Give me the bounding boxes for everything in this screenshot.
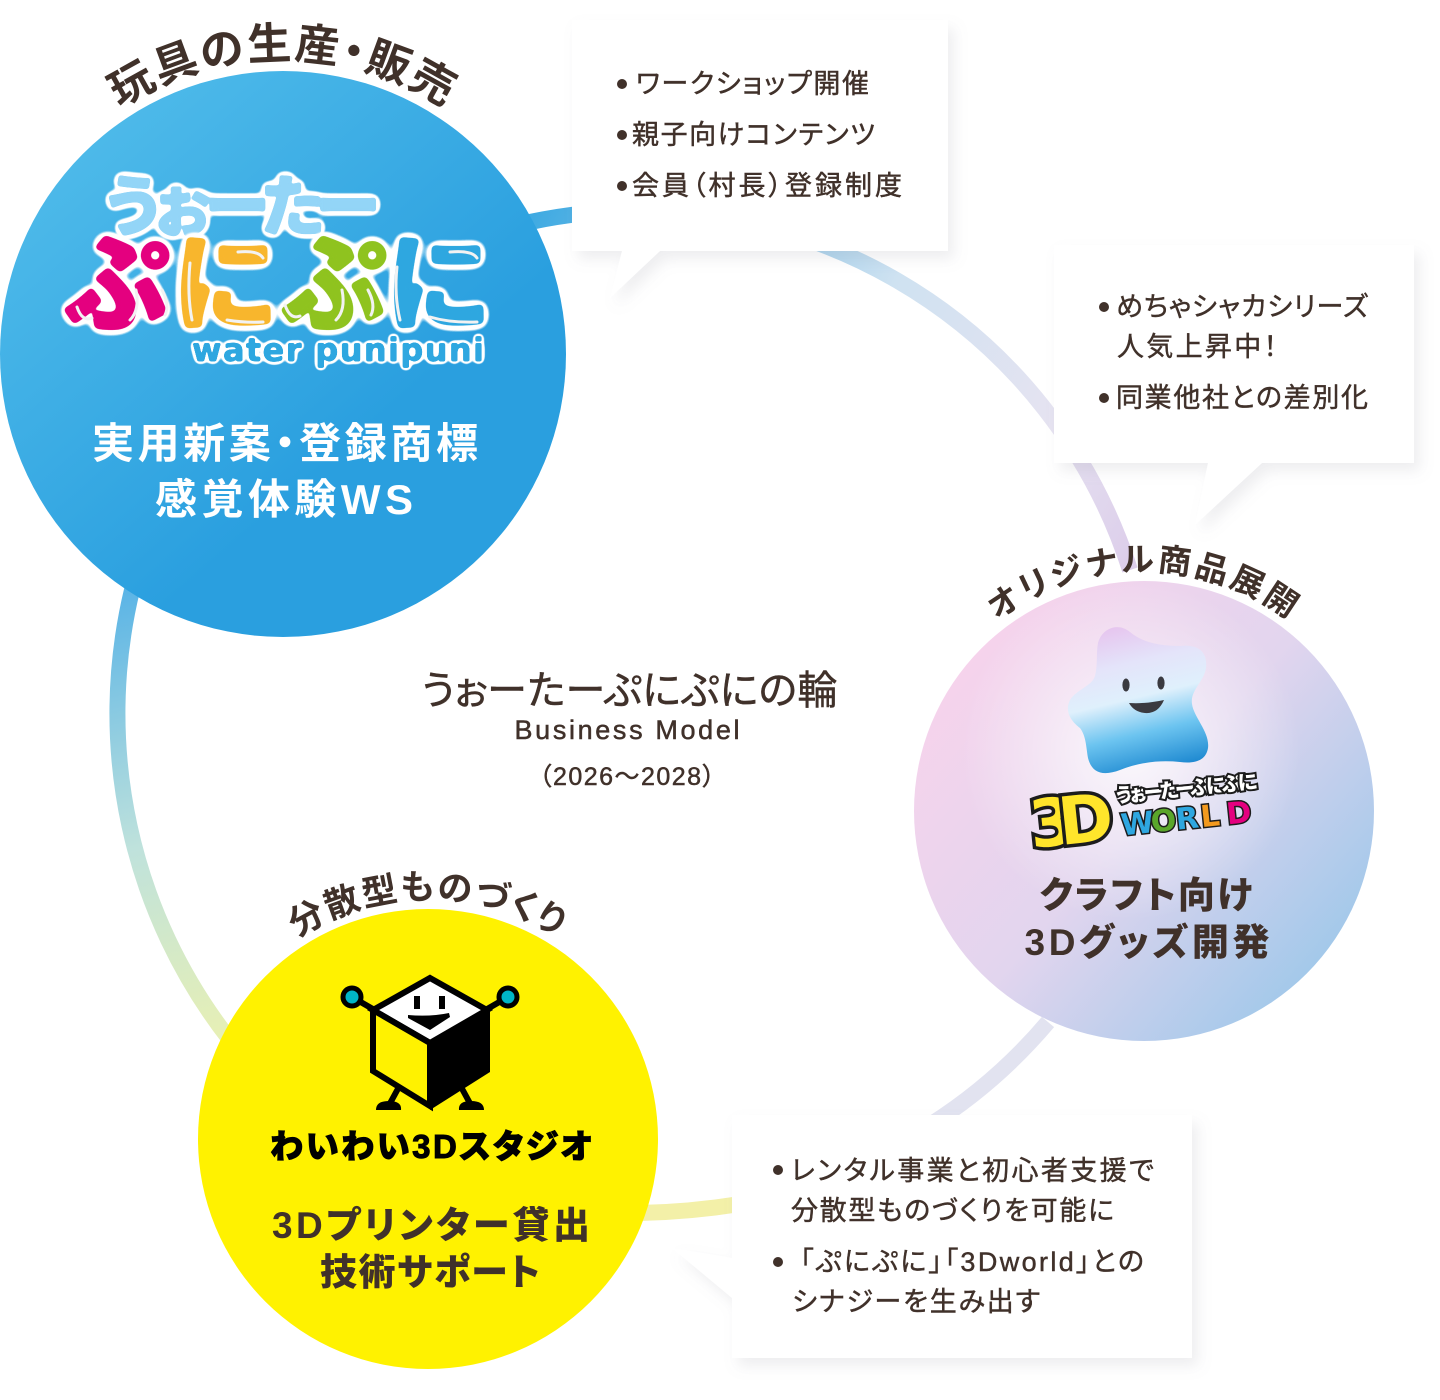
ring: business model cycle — [117, 211, 1130, 1213]
logo: 3D world: R — [1174, 800, 1201, 838]
speech bubble: workshop — [572, 20, 948, 298]
logo: 3D world: O — [1149, 803, 1178, 840]
logo: 3D world: L — [1199, 798, 1221, 835]
logo: 3D world: うぉーたーぷにぷに — [1115, 770, 1258, 808]
speech bubble: menu series: 同業他社との差別化 — [1116, 383, 1368, 413]
speech bubble: workshop: 会員（村長）登録制度 — [632, 171, 902, 201]
circle caption: 3Dプリンター貸出 — [272, 1205, 590, 1246]
circle caption: クラフト向け — [1039, 875, 1252, 916]
center heading — [422, 669, 838, 791]
logo: 3D world: W — [1119, 805, 1156, 843]
logo: water punipuni: ぷ — [281, 227, 386, 345]
center heading: うぉーたーぷにぷにの輪 — [422, 669, 838, 713]
speech bubble: menu series: めちゃシャカシリーズ — [1116, 292, 1368, 322]
speech bubble: rental: 分散型ものづくりを可能に — [791, 1196, 1114, 1226]
logo: 3D world: 3D — [1025, 779, 1117, 864]
logo: water punipuni: に — [173, 227, 276, 345]
circle caption: 感覚体験WS — [155, 476, 413, 523]
icon: star character — [1068, 627, 1208, 773]
logo: water punipuni — [64, 170, 489, 369]
logo: 3D world: D — [1225, 795, 1253, 832]
logo: water punipuni: に — [386, 227, 489, 345]
speech bubble: rental: シナジーを生み出す — [792, 1287, 1040, 1317]
speech bubble: rental — [672, 1115, 1192, 1358]
arc label: original goods: オリジナル商品展開 — [988, 544, 1301, 618]
speech bubble: workshop: ワークショップ開催 — [636, 69, 869, 99]
circle caption — [1024, 875, 1270, 963]
logo: 3D world — [1025, 763, 1263, 864]
panel: 3D printer circle — [198, 871, 658, 1369]
icon: cube character — [343, 978, 517, 1110]
arc label: toy production: 玩具の生産・販売 — [104, 22, 459, 107]
circle caption — [92, 420, 478, 523]
circle caption — [272, 1205, 590, 1293]
center heading: Business Model — [514, 715, 740, 745]
panel: 3D goods circle — [914, 544, 1374, 1041]
logo: water punipuni: water punipuni — [192, 331, 484, 369]
circle caption: 技術サポート — [320, 1252, 540, 1293]
center heading: （2026～2028） — [539, 763, 715, 791]
speech bubble: menu series: 人気上昇中！ — [1117, 332, 1277, 362]
logo: water punipuni: うぉーたー — [105, 170, 380, 244]
circle caption: 実用新案・登録商標 — [92, 420, 478, 467]
panel: toy circle — [0, 22, 566, 637]
logo: water punipuni: ぷ — [64, 227, 169, 345]
speech bubble: workshop: 親子向けコンテンツ — [632, 120, 875, 150]
logo text: waiwai 3D studio: わいわい3Dスタジオ — [270, 1128, 592, 1165]
speech bubble: rental: 「ぷにぷに」「3Dworld」との — [800, 1247, 1144, 1277]
speech bubble: rental: レンタル事業と初心者支援で — [791, 1156, 1154, 1186]
arc label: distributed manufacturing: 分散型ものづくり — [290, 871, 564, 938]
speech bubble: menu series — [1054, 245, 1414, 525]
circle caption: 3Dグッズ開発 — [1024, 921, 1270, 963]
